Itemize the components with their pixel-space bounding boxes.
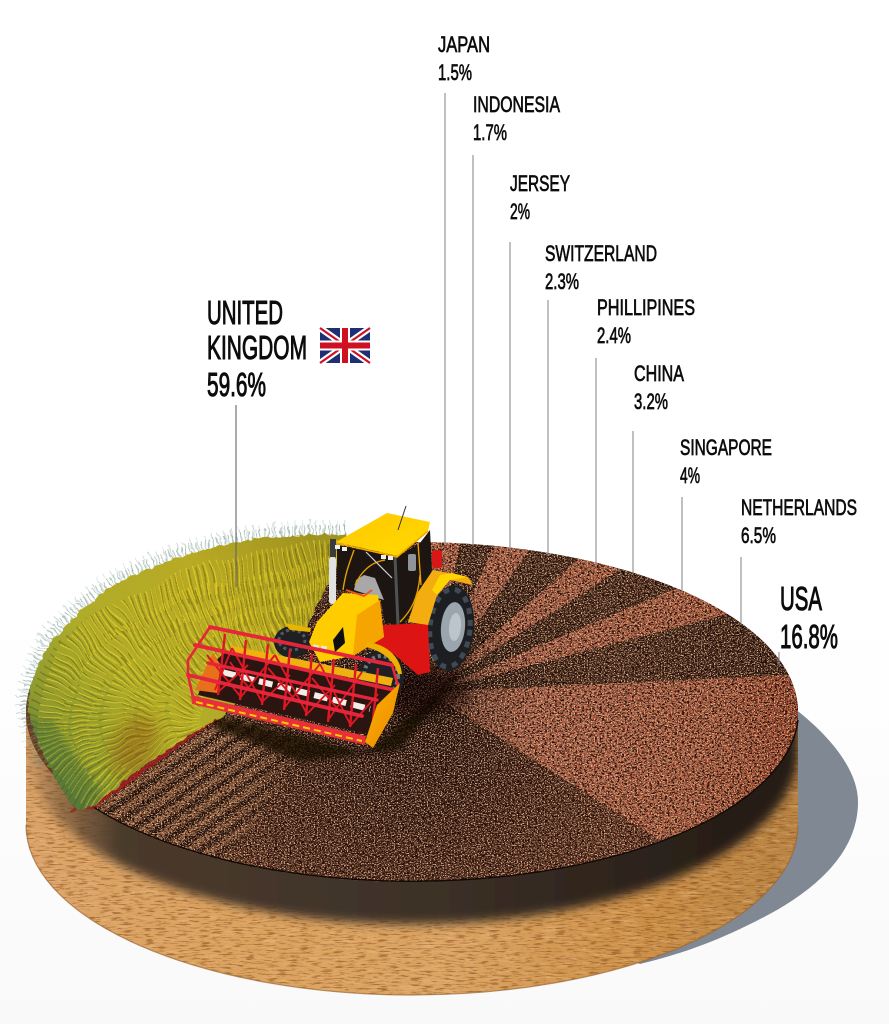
label: Switzerland (545, 241, 657, 294)
rear mudguard block (432, 550, 442, 568)
label: USA (780, 580, 838, 655)
fender highlight (432, 573, 468, 595)
grass blades, clipped (28, 540, 338, 812)
cast shadow (500, 705, 858, 964)
wedge: Switzerland (466, 550, 579, 658)
ploughed furrows (96, 712, 298, 860)
label: China (634, 361, 684, 414)
hood side face (353, 600, 384, 656)
driver seat (354, 575, 384, 600)
label: Phillipines (597, 295, 695, 348)
soil grain light (20, 530, 810, 890)
leader lines (236, 93, 779, 665)
label: Jersey: 2% (510, 199, 530, 224)
leader: China (632, 431, 634, 574)
roof (336, 513, 430, 556)
cab interior and glass (337, 530, 432, 625)
header rails (188, 627, 398, 716)
header left end (195, 653, 222, 693)
red grass fringe (70, 700, 222, 812)
sand highlights (26, 727, 798, 994)
rear wheel (424, 583, 478, 673)
mirror (408, 554, 416, 571)
leader: Switzerland (547, 300, 549, 556)
wedge: China (466, 569, 676, 676)
hood (309, 593, 384, 662)
label: Phillipines: 2.4% (597, 323, 631, 348)
label: Indonesia: 1.7% (473, 120, 507, 145)
front right wheel (358, 650, 404, 702)
leader: United Kingdom (235, 405, 237, 587)
dark topsoil band (26, 700, 798, 924)
label: USA: USA (780, 580, 822, 617)
label: United Kingdom: UNITED (207, 294, 283, 331)
rear fender (408, 570, 473, 625)
label: United Kingdom (207, 294, 307, 403)
left brown rim under grass (26, 700, 53, 774)
label: China: CHINA (634, 361, 684, 386)
label: Japan: 1.5% (438, 60, 472, 85)
leader: Phillipines (595, 358, 597, 566)
headlights (313, 646, 327, 648)
header yellow back plate (230, 646, 393, 686)
grille (333, 627, 345, 652)
header white cutter bar (222, 672, 370, 709)
icon: UK flag (320, 328, 370, 363)
wedge: Phillipines (434, 558, 620, 688)
front right fender (366, 642, 402, 674)
label: Singapore (680, 435, 772, 488)
label: United Kingdom: 59.6% (207, 366, 266, 403)
label: Jersey: JERSEY (510, 171, 570, 196)
exhaust (329, 557, 336, 604)
soft ground shadow (370, 664, 470, 716)
grass green base (28, 720, 104, 815)
label: Japan (438, 32, 490, 85)
wedge: Indonesia (460, 543, 494, 599)
cab pillars (343, 543, 421, 622)
wedge: Japan (428, 542, 460, 689)
label: Indonesia: INDONESIA (473, 92, 560, 117)
label: Japan: JAPAN (438, 32, 490, 57)
sand strata texture (26, 723, 798, 995)
bottom edge (26, 825, 798, 995)
leader: Jersey (509, 242, 511, 550)
label: USA: 16.8% (780, 618, 838, 655)
dark blade layer (28, 544, 337, 812)
label: Phillipines: PHILLIPINES (597, 295, 695, 320)
label: United Kingdom: KINGDOM (207, 329, 307, 366)
leader: Indonesia (472, 155, 474, 546)
label: Singapore: SINGAPORE (680, 435, 772, 460)
label: Switzerland: SWITZERLAND (545, 241, 657, 266)
label: Indonesia (473, 92, 560, 145)
red chassis (370, 623, 430, 675)
antenna (398, 506, 406, 530)
grass patch (14, 519, 346, 812)
sand layer (26, 712, 798, 995)
label: Switzerland: 2.3% (545, 269, 579, 294)
exhaust top (330, 539, 336, 557)
leader: USA (778, 652, 780, 665)
soil disc side wall (20, 700, 810, 1000)
roof front edge (336, 531, 428, 557)
header right end (365, 683, 400, 748)
wedge: Jersey (432, 546, 530, 685)
outer hair fringe (24, 530, 345, 767)
base field: United Kingdom dark soil (20, 530, 810, 890)
front fender left (284, 623, 311, 632)
soil grain dark (20, 530, 810, 890)
leader: Netherlands (740, 557, 742, 625)
header back interior (198, 652, 393, 735)
wiper (366, 552, 392, 578)
label: Singapore: 4% (680, 463, 700, 488)
wedge: Singapore (435, 588, 728, 690)
label: Netherlands: 6.5% (741, 523, 776, 548)
hood vent (346, 590, 372, 596)
label: Jersey (510, 171, 570, 224)
shadow under tractor (205, 640, 480, 762)
yellow blade layer (37, 540, 338, 808)
cab frame post (395, 557, 398, 625)
cab lights (335, 547, 393, 558)
grass body (28, 535, 345, 812)
leader: Singapore (681, 497, 683, 592)
tractor (188, 506, 478, 748)
rim line (92, 720, 798, 881)
leader: Japan (444, 93, 446, 545)
label: China: 3.2% (634, 389, 668, 414)
reddish patch in grass (106, 709, 164, 780)
pie top: soil disc (26, 542, 798, 882)
hazard stripe (196, 702, 362, 741)
label: Netherlands (741, 495, 857, 548)
reel spokes (207, 634, 378, 732)
header bottom bar (191, 695, 366, 745)
left front wheel (274, 626, 310, 658)
wedge: USA (432, 675, 798, 840)
wedge: Netherlands (464, 614, 789, 690)
